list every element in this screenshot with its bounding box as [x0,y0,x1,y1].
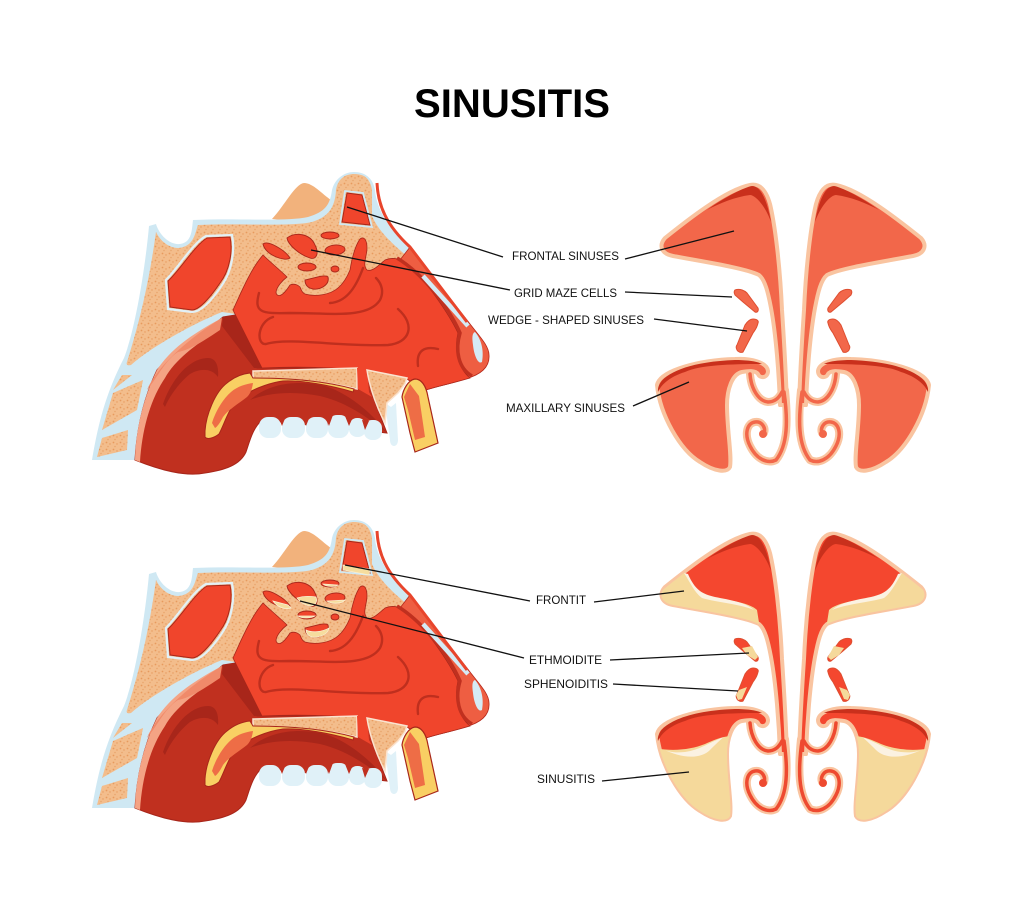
label: frontit: FRONTIT [536,593,587,607]
label: wedge-shaped sinuses: WEDGE - SHAPED SINUSES [488,313,644,327]
front view: sinusitis, right half [799,534,936,829]
side view: healthy nose cross-section [92,172,489,474]
nasal concha lines [257,268,438,366]
ethmoid capsule upper [734,289,758,312]
title: SINUSITIS [414,82,610,126]
incisive canal [357,368,372,397]
sphenoid sinus lining [166,235,233,312]
mucosa of the throat [135,318,222,462]
palate marrow [212,383,253,428]
copy of the side anatomy [92,520,489,822]
nasal curl halos [747,374,787,461]
anterior maxilla [367,370,407,423]
base anatomy [657,534,787,820]
label: sinusitis: SINUSITIS [537,772,595,786]
pus in sphenoid capsule [736,687,747,700]
front jaw bone [402,379,438,452]
frothy edge of frontal pus [684,573,754,610]
ethmoid cells [263,232,345,289]
skull bone [127,174,415,365]
maxillary dark upper wall [658,360,762,392]
teeth [259,403,398,446]
dark throat and mouth cavity [135,315,387,474]
nasal cavity and nose [233,238,470,390]
gum points between teeth [278,415,369,430]
frontal sinus [342,193,370,225]
pus in maxillary sinus [650,736,736,829]
label: ethmoidite: ETHMOIDITE [529,653,602,667]
front view: healthy sinuses, left half [657,185,787,471]
palate bone [253,368,357,389]
side view: sinusitis nose cross-section with pus [92,520,489,822]
front view: sinusitis, left half [650,534,787,829]
frontal sinus and duct [662,185,787,405]
nostril cartilage drop [472,332,483,363]
sphenoid sinus [168,237,231,310]
frontal sinus dark upper wall [707,186,771,222]
bumpy mucosa [147,318,222,390]
label: grid maze cells: GRID MAZE CELLS [514,286,617,300]
jaw marrow [404,384,425,440]
nasal curls [747,374,786,461]
maxillary sinus [657,359,768,471]
label: maxillary sinuses: MAXILLARY SINUSES [506,401,625,415]
ethmoid capsule lower [736,319,758,352]
hump of soft tissue [272,183,331,220]
nose skin [400,247,489,390]
leader lines [300,207,749,781]
nose wall dark line [397,258,472,376]
neck vertebrae [97,375,143,457]
light blue outer membrane [92,172,420,460]
skin line of forehead [377,183,467,322]
darker throat folds [163,315,265,407]
pus levels in the cells [273,565,370,637]
palate yellow bone [205,373,354,438]
nose cartilage [423,276,468,326]
pus in frontal sinus [655,573,760,629]
curl end [759,430,767,438]
front view: healthy sinuses, right half [799,185,929,471]
label: frontal sinuses: FRONTAL SINUSES [512,249,619,263]
frontal sinus lining [340,191,372,227]
label: sphenoiditis: SPHENOIDITIS [524,677,608,691]
frothy edge of maxillary pus [663,737,724,757]
pus in ethmoid capsule [742,646,758,660]
dark band under the palate [250,383,387,433]
